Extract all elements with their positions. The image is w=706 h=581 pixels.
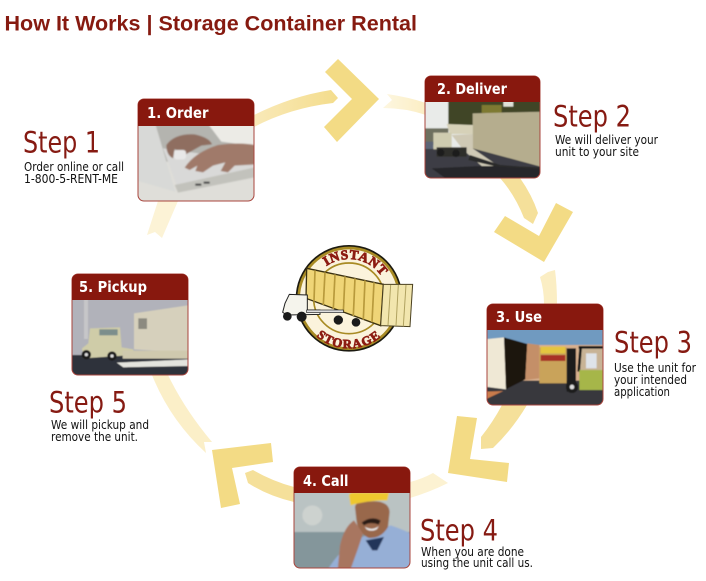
text: step 3: application — [614, 385, 670, 399]
photo: pickup truck — [72, 300, 188, 374]
panel: 5. pickup: 5. Pickup — [79, 278, 147, 296]
text: step 3 — [614, 326, 696, 399]
panel: 4. call — [291, 467, 414, 574]
text: step 4: Step 4 — [420, 514, 498, 548]
text: step 2 — [553, 100, 658, 159]
text: step 5 — [49, 386, 149, 444]
text: step 2: We will deliver your — [555, 133, 658, 147]
text: step 1: Order online or call — [24, 160, 124, 174]
panel: 2. deliver: 2. Deliver — [437, 80, 508, 98]
photo: worker on phone — [294, 493, 410, 568]
text: step 5: remove the unit. — [51, 430, 138, 444]
panel: 1. order: 1. Order — [147, 104, 209, 122]
panel: 2. deliver — [422, 76, 543, 182]
text: step 3: Use the unit for — [614, 361, 696, 375]
panel: 5. pickup — [69, 274, 191, 379]
text: step 1 — [23, 126, 124, 186]
photo: forklift loading unit — [488, 330, 602, 400]
panel: 4. call: 4. Call — [303, 472, 348, 490]
text: step 2: Step 2 — [553, 100, 631, 134]
panel: 1. order — [135, 99, 258, 205]
text: step 5: We will pickup and — [51, 418, 149, 432]
photo: delivery truck — [426, 102, 540, 178]
text: step 4 — [420, 514, 533, 570]
text: step 1: 1-800-5-RENT-ME — [24, 172, 118, 186]
logo: instant storage: STORAGE — [316, 330, 380, 349]
logo: instant storage: INSTANT — [322, 250, 389, 275]
title: How It Works | Storage Container Rental — [4, 12, 417, 36]
text: step 3: your intended — [614, 373, 687, 387]
text: step 5: Step 5 — [49, 386, 127, 420]
arrow: call to pickup — [152, 375, 294, 508]
arrow: pickup to order — [147, 201, 178, 238]
arrow: order to deliver — [254, 59, 426, 142]
panel: 3. use: 3. Use — [496, 308, 542, 326]
arrow: deliver to use — [494, 178, 573, 304]
text: step 3: Step 3 — [614, 326, 692, 360]
arrow: use to call — [410, 405, 527, 498]
text: step 4: using the unit call us. — [421, 556, 533, 570]
photo: hands on laptop — [138, 126, 254, 193]
text: step 2: unit to your site — [555, 145, 639, 159]
text: step 4: When you are done — [421, 545, 524, 559]
logo: instant storage — [282, 245, 414, 352]
text: step 1: Step 1 — [23, 126, 100, 160]
panel: 3. use — [484, 304, 606, 409]
